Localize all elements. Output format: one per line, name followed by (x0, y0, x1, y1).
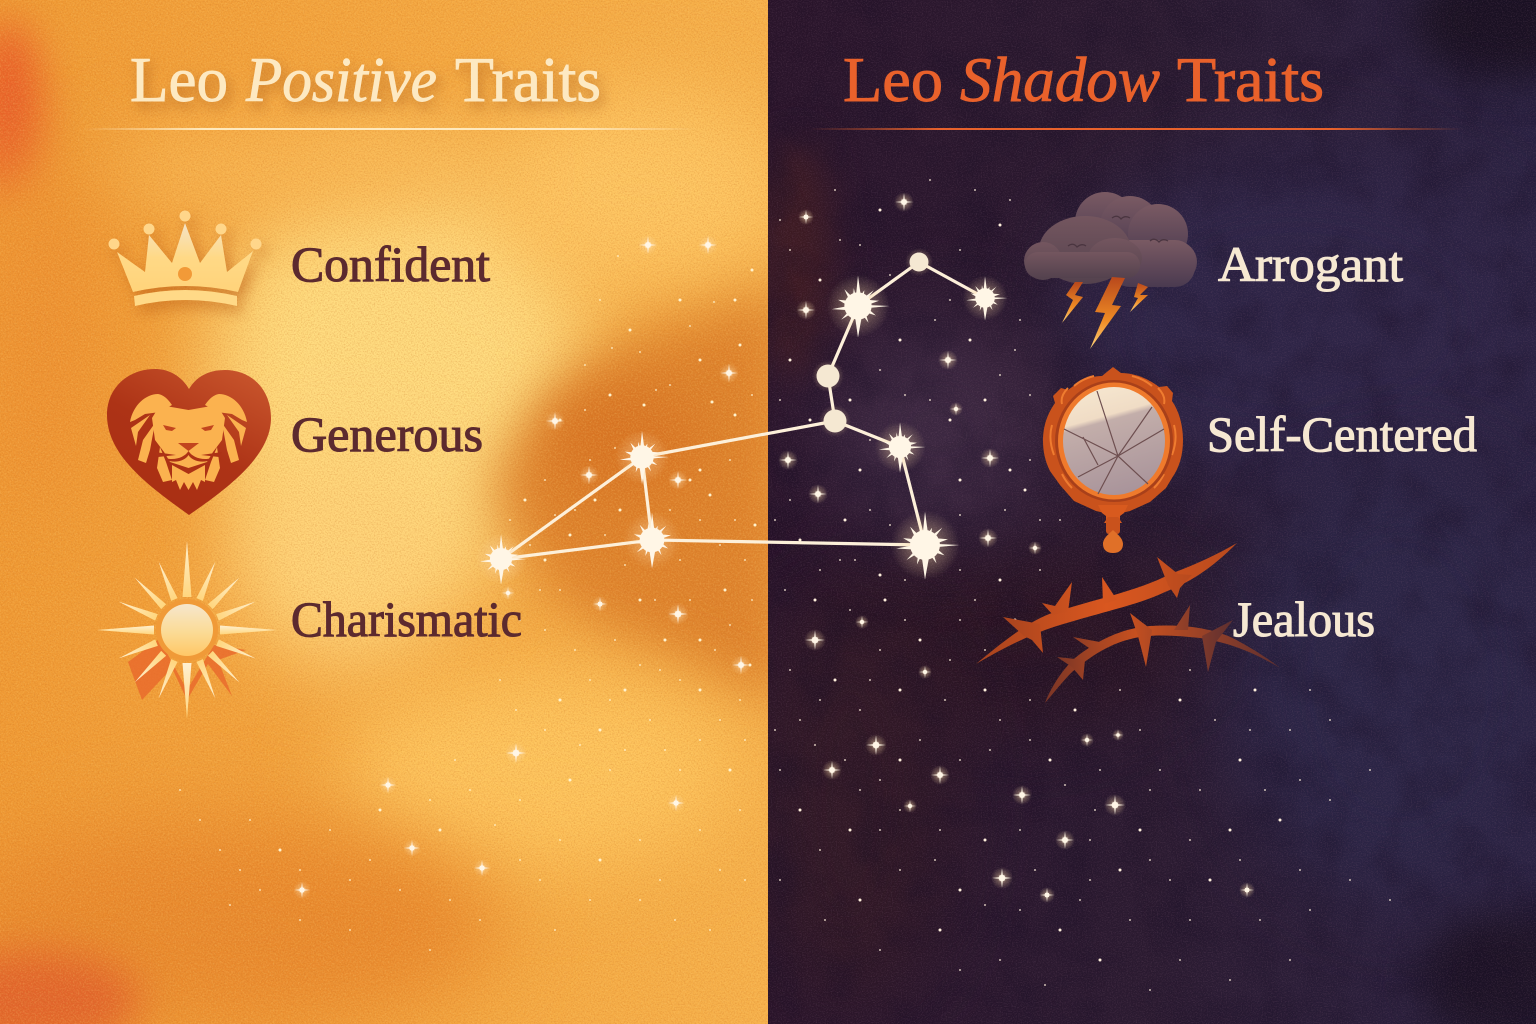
bright stars: positive side (293, 235, 751, 899)
heading: Leo Shadow Traits: Leo (843, 44, 943, 115)
panel: shadow traits background (750, 0, 1536, 1024)
heading: Leo Shadow Traits (843, 44, 1324, 115)
icon: cracked hand mirror (1043, 367, 1183, 553)
icon: thorny branches (976, 543, 1280, 703)
panel: positive traits background (0, 0, 800, 1024)
icon: heart with lion (107, 369, 271, 515)
heading: Leo Positive Traits (130, 44, 601, 115)
label: Self-Centered: Self-Centered (1207, 406, 1477, 462)
label: Arrogant: Arrogant (1218, 236, 1403, 292)
icon: storm cloud (1024, 192, 1197, 349)
heading: Leo Shadow Traits: Traits (1177, 44, 1324, 115)
heading: Leo Positive Traits: Leo (130, 44, 228, 115)
constellation: Leo (476, 248, 1008, 584)
label: Generous: Generous (291, 406, 483, 462)
heading rule: positive (82, 128, 696, 130)
heading: Leo Positive Traits: Positive (245, 44, 437, 115)
star field: positive side (180, 256, 755, 950)
heading: Leo Positive Traits: Traits (455, 44, 601, 115)
heading rule: shadow (810, 128, 1462, 130)
icon: sun (97, 541, 277, 719)
icon: crown (108, 210, 262, 306)
label: Charismatic: Charismatic (291, 591, 522, 647)
bright stars: shadow side (778, 192, 1255, 903)
label: Jealous: Jealous (1233, 591, 1375, 647)
label: Confident: Confident (291, 236, 490, 292)
star field: shadow side (775, 180, 1390, 990)
heading: Leo Shadow Traits: Shadow (960, 44, 1160, 115)
